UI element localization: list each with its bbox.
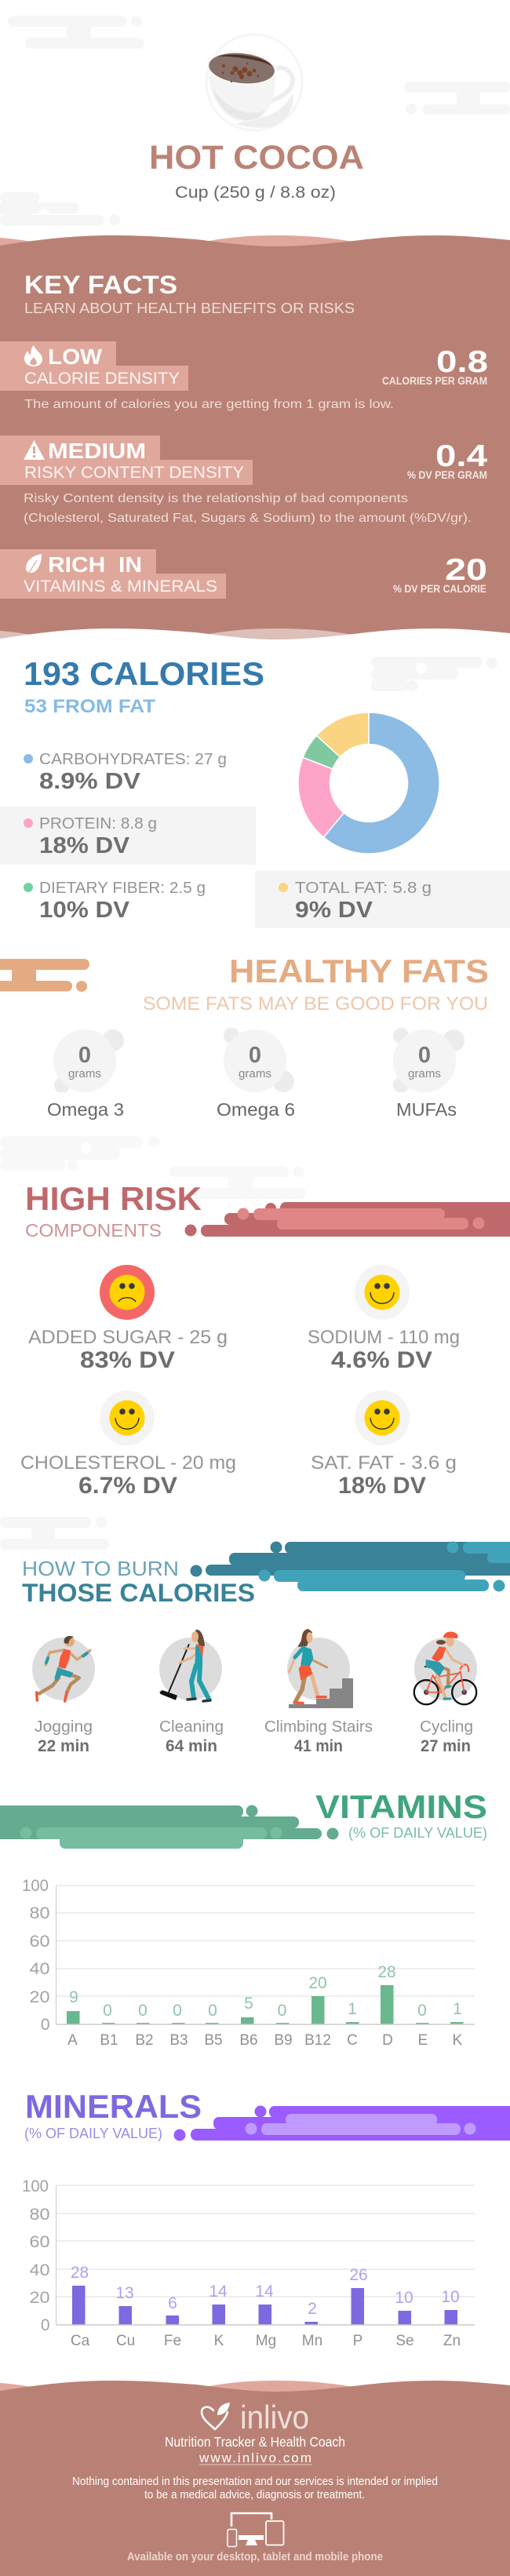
heading: how to burn: HOW TO BURN [22, 1557, 179, 1580]
bar chart: minerals: Cu [116, 2333, 135, 2349]
fact: medium risky content density: MEDIUM [48, 439, 146, 463]
legend: carbohydrates: 8.9% DV [39, 769, 141, 794]
icon: warning triangle [24, 440, 45, 460]
activity: cycling [414, 1632, 477, 1755]
fact: low calorie density: CALORIES PER GRAM [382, 375, 487, 387]
bar chart: minerals: Ca [71, 2333, 90, 2349]
title: HOT COCOA [149, 139, 364, 177]
stat: MUFAs: grams [408, 1067, 441, 1080]
fact: medium risky content density: RISKY CONTENT DENSITY [24, 464, 244, 482]
legend: protein: PROTEIN: 8.8 g [39, 815, 157, 833]
logo: inlivo [202, 2399, 309, 2436]
fact: low calorie density: LOW [48, 344, 103, 369]
bar chart: minerals: Mn [302, 2333, 322, 2349]
fact: rich in vitamins and minerals: VITAMINS & MINERALS [24, 578, 217, 596]
bar chart: minerals: 2 [308, 2300, 317, 2318]
subheading: SOME FATS MAY BE GOOD FOR YOU [143, 993, 488, 1015]
panel: how to burn those calories [22, 1541, 510, 1755]
component: saturated fat [311, 1390, 457, 1499]
legend: protein [0, 807, 256, 865]
banner: purple bars [174, 2106, 510, 2141]
icon: desktop, tablet and mobile devices [228, 2513, 284, 2547]
panel: high risk components [20, 1180, 510, 1499]
fact: rich in vitamins and minerals [0, 549, 487, 599]
activity: jogging: Jogging [35, 1718, 93, 1736]
legend: dietary fiber [24, 880, 206, 923]
panel: calories and macronutrients [0, 655, 510, 928]
disclaimer: Nothing contained in this presentation and our services is intended or implied [72, 2475, 438, 2488]
activity: jogging [32, 1636, 95, 1755]
heading: those calories: THOSE CALORIES [22, 1579, 255, 1607]
website link: www.inlivo.com [199, 2450, 311, 2465]
activity: cleaning: Cleaning [159, 1718, 224, 1736]
fact: rich in vitamins and minerals: % DV PER CALORIE [393, 583, 486, 595]
activity: cycling: 27 min [421, 1737, 471, 1755]
bar chart: vitamins: 5 [244, 1995, 253, 2013]
bar chart: vitamins: 20 [30, 1988, 50, 2006]
panel: footer [0, 2381, 510, 2576]
subheading: LEARN ABOUT HEALTH BENEFITS OR RISKS [24, 301, 355, 316]
stat: omega 3: grams [68, 1067, 101, 1080]
icon: cup of hot cocoa [206, 35, 302, 130]
stat: omega 3: Omega 3 [47, 1099, 124, 1120]
stat: omega 6: 0 [249, 1043, 261, 1068]
bar chart: minerals: 6 [168, 2294, 177, 2312]
serving size: Cup (250 g / 8.8 oz) [175, 184, 336, 202]
panel: hot cocoa header [149, 35, 364, 202]
fact: low calorie density: The amount of calories you are getting from 1 gram is low. [24, 398, 394, 411]
tagline: Nutrition Tracker & Health Coach [165, 2434, 345, 2450]
subheading: (% OF DAILY VALUE) [348, 1825, 487, 1841]
fact: medium risky content density: (Cholesterol, Saturated Fat, Sugars & Sodium) to the amount (%DV/gr). [24, 512, 472, 525]
component: sodium: 4.6% DV [331, 1347, 432, 1373]
subheading: from fat: 53 FROM FAT [24, 696, 155, 717]
bar chart: minerals: 60 [30, 2233, 50, 2251]
banner: orange bars [0, 959, 89, 992]
bar chart: vitamins: C [347, 2032, 358, 2049]
component: cholesterol [20, 1390, 236, 1499]
legend: total fat: TOTAL FAT: 5.8 g [295, 880, 432, 897]
stat: omega 6: grams [239, 1067, 271, 1080]
logo: inlivo: inlivo [240, 2399, 309, 2436]
component: cholesterol: 6.7% DV [78, 1473, 177, 1499]
component: added sugar: 83% DV [80, 1347, 175, 1373]
fact: medium risky content density: Risky Content density is the relationship of bad components [24, 492, 408, 505]
disclaimer: to be a medical advice, diagnosis or treatment. [144, 2488, 365, 2501]
icon: leaf [26, 554, 42, 573]
activity: climbing stairs: Climbing Stairs [264, 1718, 373, 1736]
bar chart: minerals: P [353, 2333, 362, 2349]
legend: total fat [255, 871, 510, 928]
bar chart: minerals: 0 [41, 2316, 50, 2334]
bar chart: minerals: K [214, 2333, 224, 2349]
component: cholesterol: CHOLESTEROL - 20 mg [20, 1452, 236, 1474]
heading: minerals: MINERALS [25, 2088, 202, 2125]
bar chart: vitamins: 28 [377, 1963, 396, 1981]
bar chart: vitamins: K [453, 2032, 463, 2049]
bar chart: vitamins: 1 [348, 2000, 357, 2018]
fact: low calorie density [0, 341, 488, 411]
bar chart: vitamins: 0 [278, 2002, 286, 2020]
bar chart: vitamins: 20 [308, 1974, 327, 1992]
subheading: (% OF DAILY VALUE) [24, 2126, 162, 2141]
icon: flame [24, 345, 42, 366]
fact: medium risky content density [0, 435, 487, 525]
subheading: components: COMPONENTS [25, 1220, 162, 1241]
component: sodium [308, 1265, 460, 1373]
bar chart: vitamins: 40 [30, 1960, 50, 1978]
availability note: Available on your desktop, tablet and mobile phone [127, 2550, 383, 2563]
bar chart: minerals: 10 [441, 2288, 460, 2306]
bar chart: minerals: Zn [443, 2333, 461, 2349]
fact: low calorie density: CALORIE DENSITY [24, 370, 180, 388]
bar chart: vitamins: 0 [41, 2016, 50, 2034]
fact: rich in vitamins and minerals: RICH IN [48, 552, 142, 577]
bar chart: vitamins: 0 [173, 2002, 182, 2020]
donut chart [298, 712, 439, 854]
icon: woman climbing stairs [289, 1629, 353, 1708]
activity: cleaning [159, 1630, 224, 1755]
stat: MUFAs [393, 1028, 464, 1120]
bar chart: vitamins: 0 [138, 2002, 148, 2020]
stat: omega 6 [217, 1028, 295, 1120]
banner: teal bars [190, 1541, 510, 1591]
bar chart: vitamins: B1 [100, 2032, 118, 2049]
activity: jogging: 22 min [38, 1737, 89, 1755]
stat: MUFAs: 0 [418, 1043, 431, 1068]
activity: cleaning: 64 min [166, 1737, 217, 1755]
bar chart: vitamins [22, 1877, 475, 2049]
stat: MUFAs: MUFAs [396, 1099, 457, 1120]
icon: person sweeping [159, 1630, 210, 1701]
bar chart: minerals: 14 [255, 2283, 274, 2301]
activity: climbing stairs [264, 1629, 373, 1755]
legend: dietary fiber: DIETARY FIBER: 2.5 g [39, 880, 206, 897]
activity: cycling: Cycling [420, 1718, 473, 1736]
bar chart: vitamins: B9 [274, 2032, 293, 2049]
bar chart: vitamins: D [382, 2032, 393, 2049]
bar chart: vitamins: A [67, 2032, 78, 2049]
bar chart: vitamins: B2 [135, 2032, 154, 2049]
panel: key facts [0, 235, 510, 664]
bar chart: vitamins: B5 [204, 2032, 223, 2049]
banner: red bars [185, 1202, 510, 1237]
bar chart: minerals: Se [395, 2333, 414, 2349]
heading: calories: 193 CALORIES [24, 655, 264, 692]
bar chart: vitamins: 100 [22, 1877, 49, 1895]
activity: climbing stairs: 41 min [294, 1737, 343, 1755]
panel: vitamins [0, 1788, 487, 2049]
bar chart: minerals: Fe [164, 2333, 181, 2349]
bar chart: minerals: 80 [30, 2206, 50, 2224]
panel: healthy fats [0, 953, 489, 1120]
stat: omega 6: Omega 6 [217, 1099, 295, 1120]
bar chart: vitamins: 60 [30, 1933, 50, 1951]
heading: key facts: KEY FACTS [24, 271, 177, 299]
legend: carbohydrates: CARBOHYDRATES: 27 g [39, 751, 227, 768]
component: added sugar [28, 1265, 228, 1373]
legend: protein: 18% DV [39, 833, 130, 858]
bar chart: vitamins: E [418, 2032, 428, 2049]
bar chart: vitamins: B6 [239, 2032, 258, 2049]
bar chart: minerals: 20 [30, 2289, 50, 2307]
bar chart: vitamins: 0 [103, 2002, 112, 2020]
bar chart: minerals [22, 2177, 475, 2349]
heading: high risk: HIGH RISK [25, 1180, 202, 1217]
component: sodium: SODIUM - 110 mg [308, 1327, 460, 1348]
icon: jogger [37, 1636, 90, 1701]
stat: omega 3 [47, 1029, 124, 1120]
bar chart: minerals: Mg [256, 2333, 276, 2349]
bar chart: minerals: 40 [30, 2261, 50, 2279]
heading: healthy fats: HEALTHY FATS [229, 953, 489, 989]
bar chart: vitamins: 80 [30, 1904, 50, 1922]
stat: omega 3: 0 [78, 1043, 91, 1068]
fact: low calorie density: 0.8 [436, 345, 488, 379]
icon: cyclist [414, 1632, 476, 1704]
bar chart: minerals: 100 [22, 2177, 49, 2195]
legend: total fat: 9% DV [295, 898, 373, 923]
banner: green bars [0, 1805, 339, 1849]
bar chart: vitamins: 9 [69, 1988, 78, 2006]
bar chart: vitamins: 0 [208, 2002, 217, 2020]
bar chart: vitamins: 1 [453, 2000, 462, 2018]
fact: medium risky content density: 0.4 [435, 439, 487, 473]
legend: dietary fiber: 10% DV [39, 898, 130, 923]
fact: rich in vitamins and minerals: 20 [445, 553, 487, 587]
bar chart: minerals: 26 [349, 2266, 368, 2284]
bar chart: minerals: 13 [115, 2284, 134, 2302]
bar chart: minerals: 14 [209, 2283, 228, 2301]
bar chart: vitamins: B3 [169, 2032, 188, 2049]
bar chart: vitamins: 0 [417, 2002, 427, 2020]
component: saturated fat: SAT. FAT - 3.6 g [311, 1452, 457, 1474]
panel: minerals [22, 2088, 510, 2349]
component: saturated fat: 18% DV [338, 1473, 426, 1499]
legend: carbohydrates [24, 751, 227, 794]
bar chart: minerals: 10 [395, 2289, 413, 2307]
heading: vitamins: VITAMINS [315, 1788, 487, 1825]
bar chart: vitamins: B12 [304, 2032, 331, 2049]
disclaimer [72, 2475, 438, 2501]
bar chart: minerals: 28 [71, 2264, 89, 2282]
fact: medium risky content density: % DV PER GRAM [407, 469, 487, 481]
component: added sugar: ADDED SUGAR - 25 g [28, 1327, 228, 1348]
